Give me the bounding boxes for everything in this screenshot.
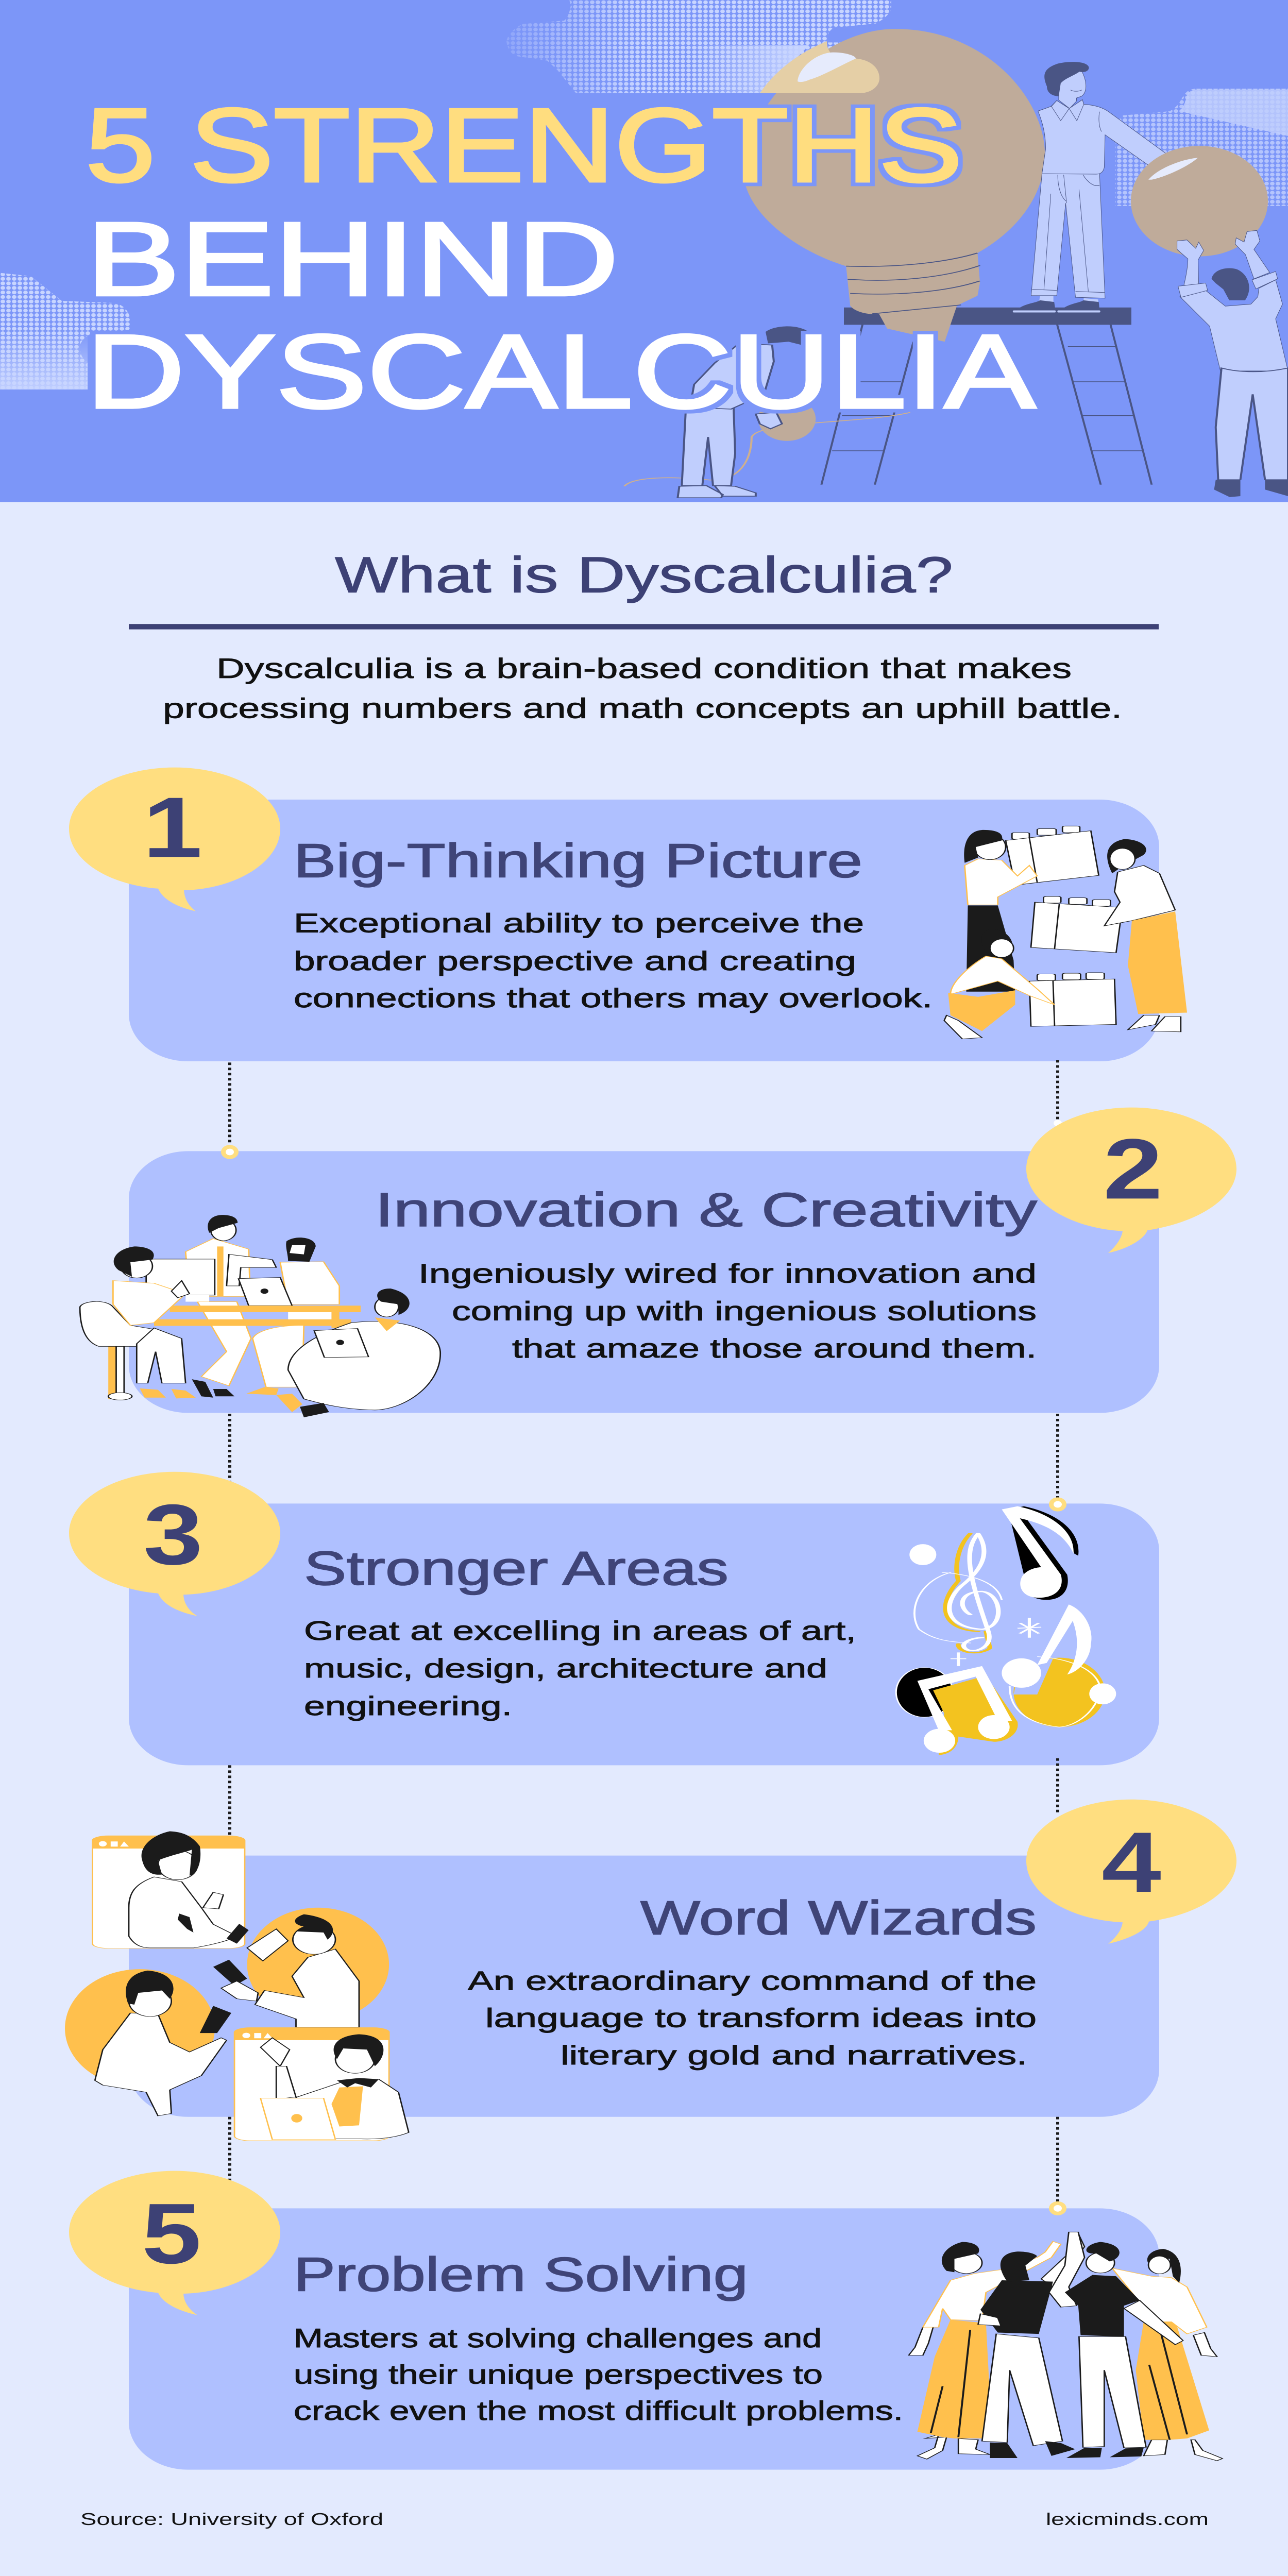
icon: double note [896,1666,1018,1755]
heading 1: Big-Thinking Picture [294,834,862,888]
heading 3: Stronger Areas [304,1542,728,1595]
text 1: Exceptional ability to perceive the [294,909,864,938]
text 3: music, design, architecture and [304,1654,827,1683]
icon: black note [1002,1506,1078,1600]
heading 2: Innovation & Creativity [375,1183,1038,1236]
panel: card backgrounds [129,800,1159,2470]
dotted connectors [230,1060,1058,2205]
intro text [163,653,1122,724]
illustration: team at desk [80,1215,440,1417]
icon: large light bulb [743,29,1045,342]
text 2: coming up with ingenious solutions [452,1296,1037,1326]
text 4: literary gold and narratives. [561,2041,1027,2071]
illustration: woman bending with bulb [624,326,910,498]
text 2: Ingeniously wired for innovation and [418,1259,1037,1289]
person with envelope [213,1914,359,2027]
text 4: An extraordinary command of the [468,1966,1037,1996]
halftone cloud: top [506,0,891,93]
title [86,87,1036,430]
window bottom [234,2028,409,2141]
footer: source: Source: University of Oxford [80,2510,383,2529]
text 5: crack even the most difficult problems. [294,2396,903,2426]
title: DYSCALCULIA [86,313,1036,430]
heading 5: Problem Solving [294,2248,748,2301]
bulb halftone overlap and highlight [760,41,879,93]
intro text: Dyscalculia is a brain-based condition that makes [216,653,1072,684]
person middle right [1049,2232,1183,2458]
text 4 [468,1966,1037,2071]
number 4: 4 [1101,1814,1161,1910]
text 5 [294,2324,903,2426]
halftone cloud: left [0,273,131,389]
speech bubble 2 [1026,1108,1236,1253]
panel: strength 4 [65,1800,1236,2141]
icon: yellow note [1002,1604,1116,1727]
header banner [0,0,1288,502]
panel: strength 3 [69,1472,1116,1755]
window top [93,1831,249,1948]
person far left [909,2242,1061,2459]
text 2: that amaze those around them. [512,1334,1037,1364]
text 5: Masters at solving challenges and [294,2324,822,2353]
speech bubble 4 [1026,1800,1236,1944]
heading: what is dyscalculia: What is Dyscalculia? [335,546,953,603]
panel: strength 5 [69,2171,1223,2461]
text 5: using their unique perspectives to [294,2360,823,2389]
text 1: connections that others may overlook. [294,984,933,1013]
number 3: 3 [143,1486,203,1582]
ladder [821,325,1151,485]
illustration: person standing at lower right [1214,368,1288,497]
footer: website: lexicminds.com [1046,2510,1209,2529]
text 1: broader perspective and creating [294,946,856,976]
heading rule [129,624,1159,630]
speech bubble 5 [69,2171,280,2315]
number 5: 5 [142,2185,201,2281]
connector end rings [221,1120,1066,2215]
person far right [1112,2249,1223,2461]
icon: treble clef [914,1534,1002,1653]
text 3: engineering. [304,1691,512,1721]
person middle left [978,2233,1084,2458]
illustration: people messaging [65,1831,409,2141]
title: BEHIND [86,200,619,317]
panel: strength 2 [80,1108,1236,1417]
platform [844,308,1131,325]
text 3: Great at excelling in areas of art, [304,1616,856,1646]
text 3 [304,1616,856,1721]
illustration: building blocks [944,826,1187,1039]
speech bubble 1 [69,768,280,911]
speech bubble 3 [69,1472,280,1616]
heading 4: Word Wizards [640,1891,1037,1945]
number 1: 1 [143,779,202,875]
text 1 [294,909,933,1013]
title: 5 STRENGTHS [86,87,962,204]
illustration: man on platform [1013,62,1166,313]
text 4: language to transform ideas into [485,2003,1037,2033]
intro text: processing numbers and math concepts an uphill battle. [163,693,1122,724]
illustration: person lifting bulb [1177,230,1288,371]
illustration: team high five [909,2232,1223,2461]
panel: strength 1 [69,768,1187,1039]
illustration: music notes [896,1506,1116,1755]
number 2: 2 [1103,1121,1163,1217]
person with phone [95,1971,231,2116]
icon: small light bulb [1131,146,1268,257]
text 2 [418,1259,1037,1364]
halftone cloud: right [1115,89,1288,206]
